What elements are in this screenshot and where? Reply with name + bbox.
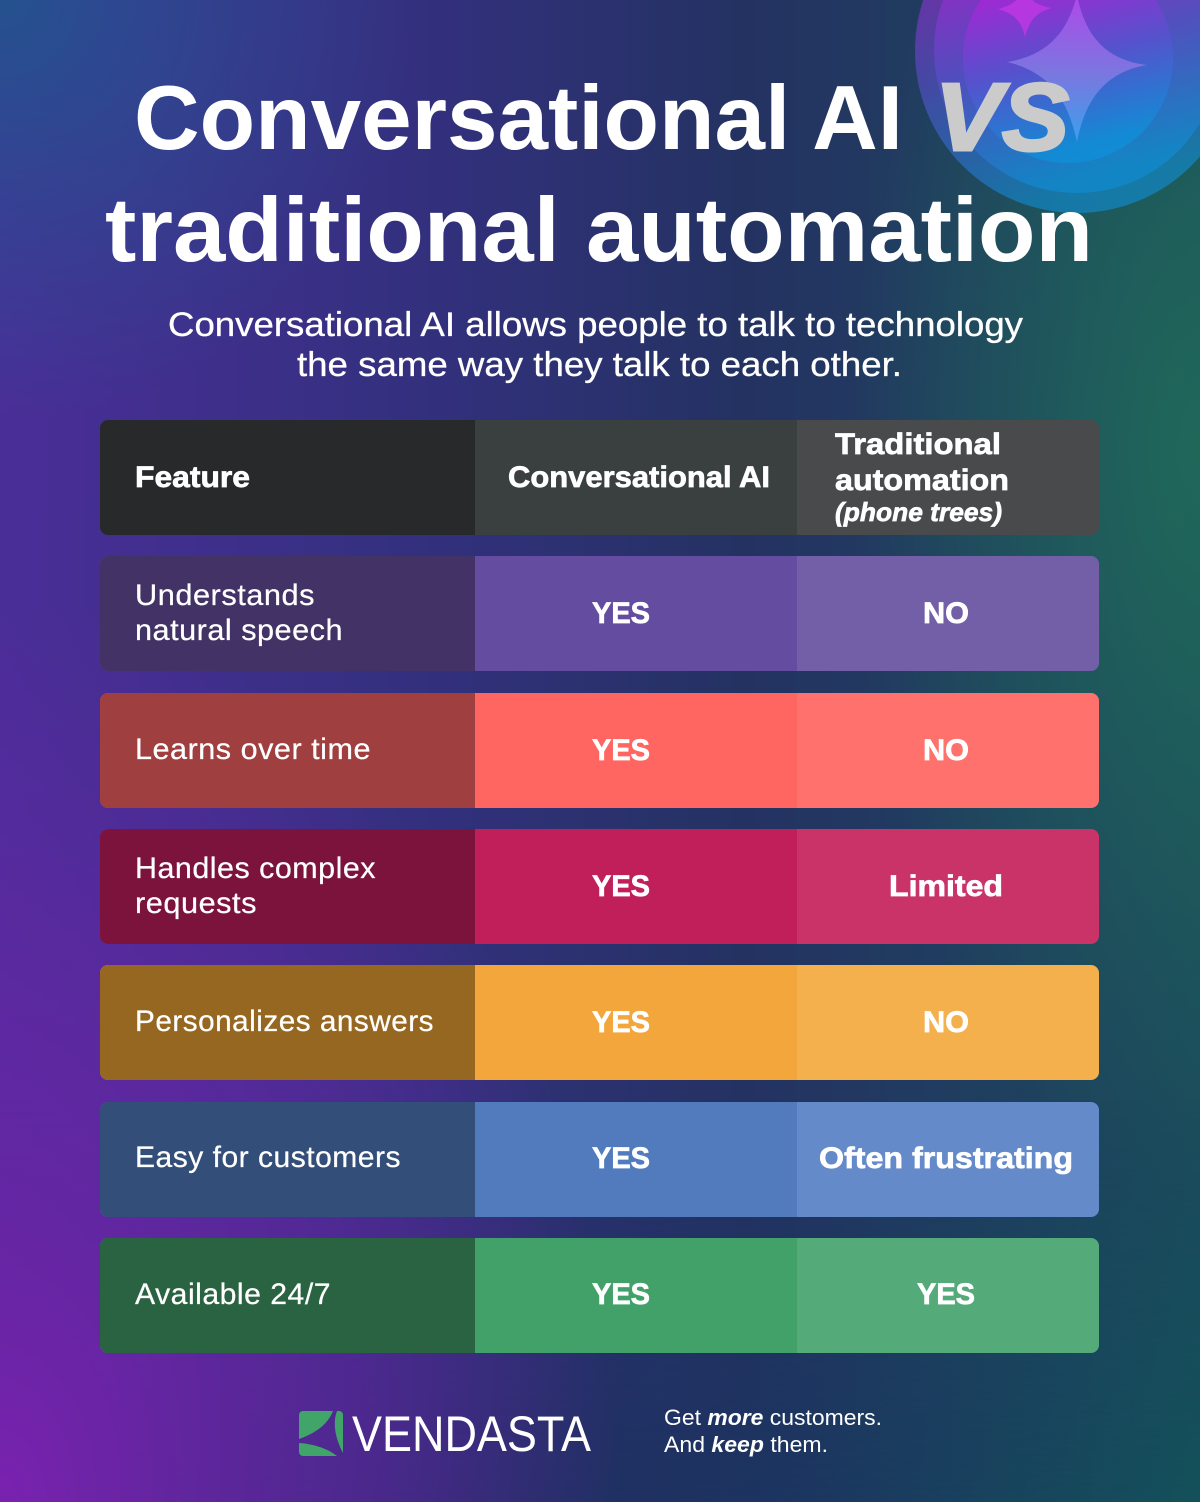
tagline: And keep them. bbox=[664, 1432, 828, 1457]
subtitle: Conversational AI allows people to talk to technology bbox=[168, 306, 1023, 344]
row: personalizes answers: YES bbox=[592, 1006, 650, 1039]
subtitle: the same way they talk to each other. bbox=[297, 346, 902, 384]
row: understands natural speech bbox=[100, 556, 1099, 671]
row: handles complex requests: Limited bbox=[889, 870, 1003, 903]
row: easy for customers: Often frustrating bbox=[819, 1142, 1073, 1175]
icon: Vendasta mark bbox=[299, 1411, 343, 1456]
row: handles complex requests bbox=[100, 829, 1099, 944]
row: personalizes answers: Personalizes answers bbox=[135, 1005, 434, 1038]
title bbox=[105, 64, 1093, 281]
icon: sparkle circle bbox=[915, 0, 1200, 213]
header row: Traditional bbox=[835, 428, 1001, 461]
row: easy for customers bbox=[100, 1102, 1099, 1217]
logo: Vendasta: VENDASTA bbox=[352, 1406, 592, 1462]
icon: small star bbox=[998, 0, 1052, 37]
row: learns over time: YES bbox=[592, 734, 650, 767]
title: VS: VS bbox=[935, 64, 1069, 171]
row: available 24/7: YES bbox=[592, 1278, 650, 1311]
title: traditional automation bbox=[105, 180, 1093, 281]
row: personalizes answers bbox=[100, 965, 1099, 1080]
row: handles complex requests: Handles complex bbox=[135, 852, 376, 885]
row: easy for customers: Easy for customers bbox=[135, 1141, 401, 1174]
header row: Conversational AI bbox=[508, 461, 770, 494]
row: available 24/7: YES bbox=[917, 1278, 975, 1311]
header row: (phone trees) bbox=[835, 497, 1002, 527]
row: personalizes answers: NO bbox=[923, 1006, 969, 1039]
row: understands natural speech: NO bbox=[923, 597, 969, 630]
subtitle bbox=[168, 306, 1023, 384]
table bbox=[100, 420, 1099, 1353]
tagline bbox=[664, 1405, 882, 1457]
row: learns over time: Learns over time bbox=[135, 733, 371, 766]
row: handles complex requests: YES bbox=[592, 870, 650, 903]
row: available 24/7 bbox=[100, 1238, 1099, 1353]
header row bbox=[100, 420, 1099, 535]
row: understands natural speech: natural speech bbox=[135, 614, 343, 647]
row: understands natural speech: YES bbox=[592, 597, 650, 630]
row: handles complex requests: requests bbox=[135, 887, 257, 920]
row: understands natural speech: Understands bbox=[135, 579, 315, 612]
row: available 24/7: Available 24/7 bbox=[135, 1278, 331, 1311]
tagline: Get more customers. bbox=[664, 1405, 882, 1430]
title: Conversational AI bbox=[134, 68, 903, 169]
row: learns over time: NO bbox=[923, 734, 969, 767]
icon: large star bbox=[1007, 0, 1147, 142]
header row: Feature bbox=[135, 461, 250, 494]
header row: automation bbox=[835, 464, 1009, 497]
row: easy for customers: YES bbox=[592, 1142, 650, 1175]
row: learns over time bbox=[100, 693, 1099, 808]
